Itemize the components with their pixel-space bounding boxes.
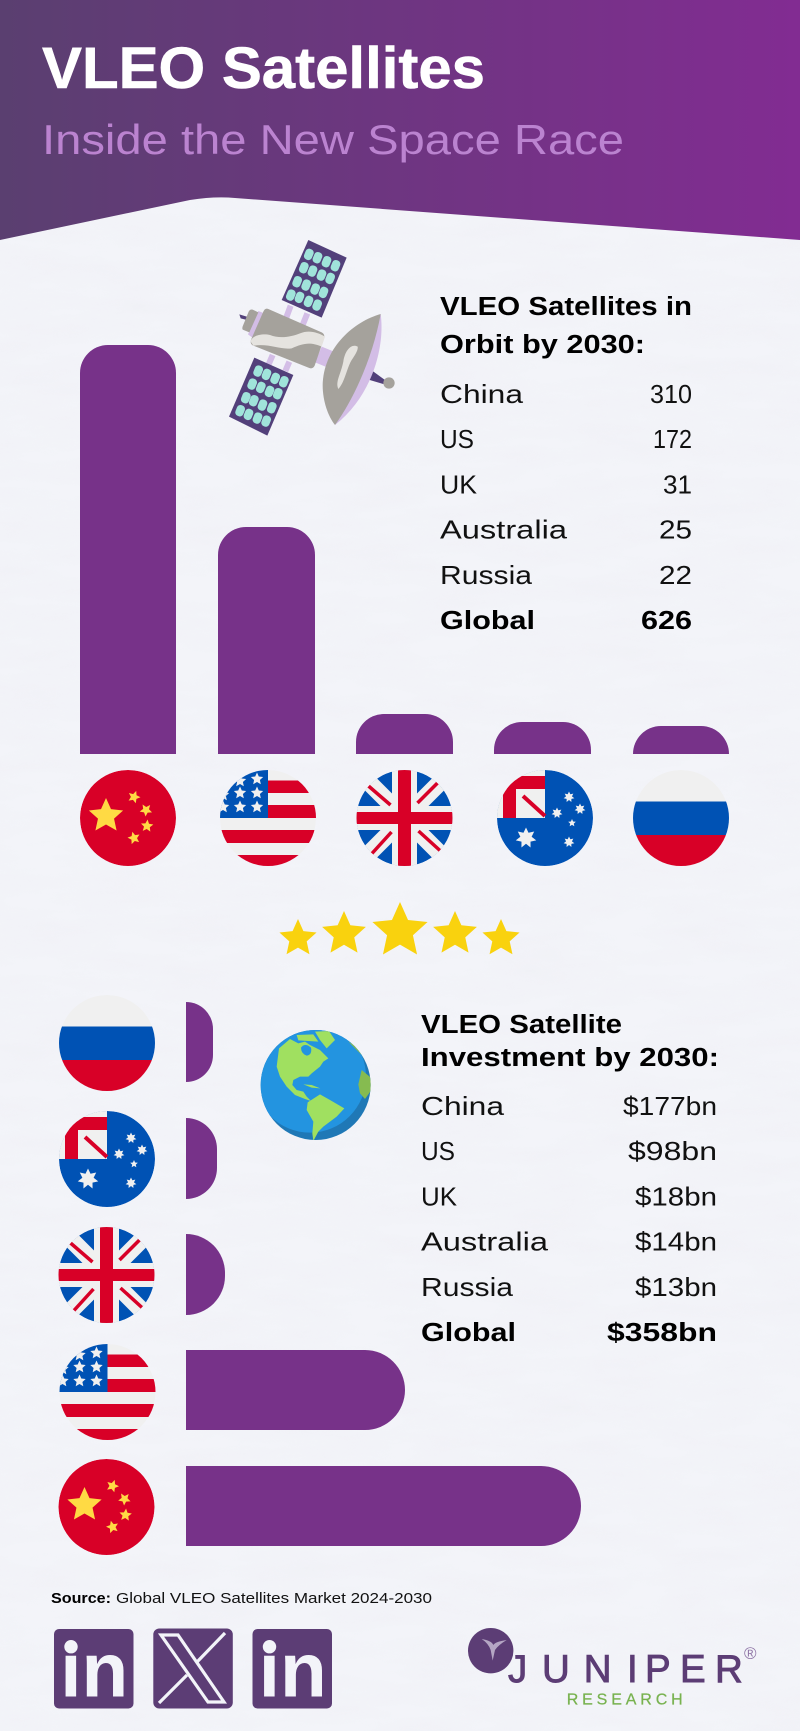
icon: satellite xyxy=(229,240,395,436)
table rows: Russia xyxy=(440,560,533,590)
table rows: Australia xyxy=(440,514,568,544)
table heading: Orbit by 2030: xyxy=(440,331,645,359)
table rows: 22 xyxy=(659,560,692,590)
table rows xyxy=(421,1091,717,1347)
subtitle: Inside the New Space Race xyxy=(42,116,624,163)
table rows: $177bn xyxy=(623,1091,717,1121)
table rows: Global xyxy=(421,1317,516,1347)
flags column: Russia, Australia, UK, US, China xyxy=(56,995,156,1555)
table rows: UK xyxy=(440,470,478,500)
icon: globe xyxy=(260,1030,371,1140)
table rows: Global xyxy=(440,605,535,635)
header band xyxy=(0,0,800,240)
table rows: US xyxy=(440,424,474,454)
table rows: $358bn xyxy=(607,1317,717,1347)
source note: Source: xyxy=(51,1590,111,1607)
table heading xyxy=(421,1011,719,1072)
title: VLEO Satellites xyxy=(42,36,485,101)
bar chart: investment xyxy=(186,1002,581,1546)
logo mark xyxy=(468,1628,513,1673)
table rows: $14bn xyxy=(635,1226,717,1256)
table rows: China xyxy=(421,1091,505,1121)
table rows: Russia xyxy=(421,1272,514,1302)
table rows: $13bn xyxy=(635,1272,717,1302)
table rows: 310 xyxy=(650,379,692,409)
icon: X xyxy=(153,1628,233,1708)
table rows: 626 xyxy=(641,605,692,635)
table heading: VLEO Satellite xyxy=(421,1011,622,1039)
table: satellites in orbit xyxy=(440,293,692,635)
icon: LinkedIn: in xyxy=(60,1628,128,1714)
table rows: US xyxy=(421,1136,455,1166)
stars divider xyxy=(279,902,520,954)
table: investment xyxy=(421,1011,719,1347)
table rows: 31 xyxy=(663,470,692,500)
wordmark: JUNIPER xyxy=(508,1648,743,1691)
source note: Global VLEO Satellites Market 2024-2030 xyxy=(116,1590,432,1607)
table rows: 172 xyxy=(653,424,692,454)
research label: RESEARCH xyxy=(567,1691,683,1708)
logo: Juniper Research xyxy=(468,1628,757,1708)
table heading xyxy=(440,293,692,359)
icon: LinkedIn: in xyxy=(259,1628,327,1714)
table rows: 25 xyxy=(659,514,692,544)
flags row: China, US, UK, Australia, Russia xyxy=(80,770,729,867)
table rows: $18bn xyxy=(635,1182,717,1212)
table rows: China xyxy=(440,379,524,409)
table rows xyxy=(440,379,692,635)
table heading: Investment by 2030: xyxy=(421,1044,719,1072)
table rows: Australia xyxy=(421,1226,549,1256)
table rows: $98bn xyxy=(628,1136,717,1166)
table rows: UK xyxy=(421,1182,458,1212)
table heading: VLEO Satellites in xyxy=(440,293,692,321)
registered mark: ® xyxy=(744,1644,757,1663)
bar chart: satellites in orbit xyxy=(80,345,729,754)
